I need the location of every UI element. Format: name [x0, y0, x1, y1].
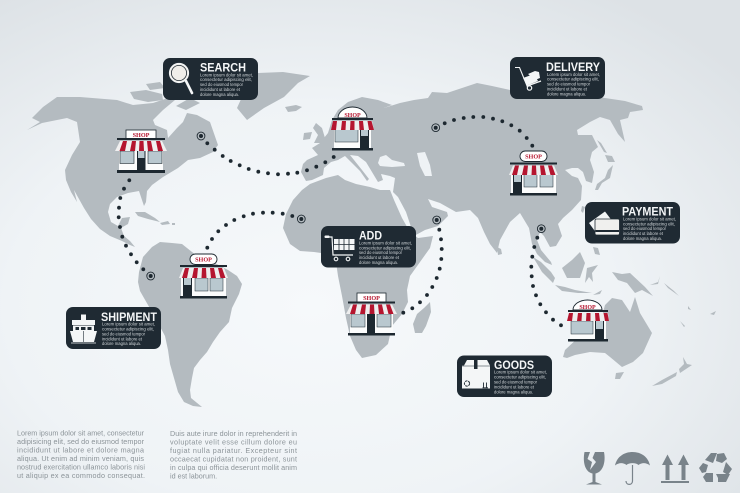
callout: goods: consectetur adipiscing elit,	[494, 375, 546, 380]
callout: shipment: Lorem ipsum dolor sit amet,	[102, 322, 155, 327]
callout: shipment	[66, 307, 161, 349]
callout: search: SEARCH	[200, 62, 246, 74]
icon: shopping cart	[324, 236, 354, 261]
callout: delivery: dolore magna aliqua.	[547, 91, 586, 96]
shop: China	[509, 151, 558, 196]
callout: add: incididunt ut labore et	[359, 255, 400, 260]
New Guinea and Pacific islands	[612, 272, 716, 327]
Sumatra and Java	[533, 257, 602, 295]
callout: search	[163, 58, 258, 100]
callout: goods: incididunt ut labore et	[494, 384, 535, 389]
icon: hand truck	[515, 68, 541, 90]
callout: payment	[585, 202, 680, 244]
icon: this way up arrows	[661, 454, 689, 483]
callout: delivery: consectetur adipiscing elit,	[547, 77, 599, 82]
inland seas	[378, 152, 432, 176]
text block: left paragraph: adipisicing elit, sed do eiusmod tempor	[17, 437, 145, 446]
shop: Europe	[331, 107, 374, 150]
callout: shipment: SHIPMENT	[101, 312, 157, 324]
Africa	[283, 175, 433, 358]
callout: search: dolore magna aliqua.	[200, 92, 239, 97]
route: Thailand to Australia	[529, 225, 563, 327]
callout: payment: consectetur adipiscing elit,	[623, 221, 675, 226]
callout: delivery: sed do eiusmod tempor	[547, 82, 591, 87]
callout: payment: Lorem ipsum dolor sit amet,	[623, 216, 676, 221]
shop: Africa: SHOP	[363, 295, 380, 302]
callout: add: consectetur adipiscing elit,	[359, 245, 411, 250]
callout: add	[321, 226, 416, 268]
Arctic islands	[130, 82, 200, 110]
Australia	[563, 297, 652, 367]
callout: delivery: Lorem ipsum dolor sit amet,	[547, 72, 600, 77]
callout: payment: sed do eiusmod tempor	[623, 226, 667, 231]
callout: shipment: consectetur adipiscing elit,	[102, 326, 154, 332]
shop: North America: SHOP	[133, 132, 150, 139]
text block: right paragraph: in culpa qui officia deserunt mollit anim	[170, 463, 297, 472]
shop: China: SHOP	[525, 153, 542, 160]
route: Brazil to West Africa	[205, 211, 305, 250]
route: Horn of Africa to South Africa	[401, 216, 444, 315]
shop: Australia	[567, 300, 609, 342]
callout: goods: sed do eiusmod tempor	[494, 380, 538, 384]
callout: payment: dolore magna aliqua.	[623, 236, 662, 241]
callout: add: sed do eiusmod tempor	[359, 250, 403, 255]
Borneo and Sulawesi	[562, 252, 598, 283]
Japan and Sakhalin	[595, 140, 615, 190]
callout: delivery: incididunt ut labore et	[547, 86, 588, 92]
shop: Australia: SHOP	[579, 305, 596, 311]
shop: South America	[179, 254, 228, 298]
callout: add: ADD	[359, 230, 382, 242]
Tasmania	[615, 372, 624, 379]
shop: South America: SHOP	[195, 256, 212, 263]
callout: goods: Lorem ipsum dolor sit amet,	[494, 370, 547, 375]
icon: ship	[70, 314, 97, 343]
world map	[27, 72, 716, 407]
icon: umbrella	[615, 452, 650, 484]
text block: left paragraph	[17, 428, 145, 480]
New Zealand	[652, 357, 692, 386]
text block: right paragraph: occaecat cupidatat non proident, sunt	[170, 454, 297, 464]
Sri Lanka, Taiwan and Philippines	[497, 206, 600, 255]
text block: left paragraph: aliqua. Ut enim ad minim veniam, quis	[17, 454, 144, 463]
Eurasia	[301, 83, 643, 265]
icon: credit cards	[589, 212, 620, 235]
shop: North America	[115, 130, 167, 173]
South America	[138, 242, 242, 407]
text block: left paragraph: nostrud exercitation ullamco laboris nisi	[17, 462, 145, 472]
callout: add: dolore magna aliqua.	[359, 260, 398, 265]
callout: search: Lorem ipsum dolor sit amet,	[200, 72, 253, 77]
callout: add: Lorem ipsum dolor sit amet,	[359, 240, 412, 245]
text block: right paragraph: voluptate velit esse cillum dolore eu	[170, 438, 297, 446]
North America	[27, 97, 218, 247]
text block: left paragraph: ut aliquip ex ea commodo consequat.	[17, 471, 145, 480]
route: USA to Peru	[117, 178, 155, 280]
callout: shipment: sed do eiusmod tempor	[102, 331, 146, 336]
callout: goods	[457, 356, 552, 397]
text block: left paragraph: incididunt ut labore et dolore magna	[17, 446, 144, 454]
Iceland	[285, 105, 302, 112]
callout: shipment: dolore magna aliqua.	[102, 341, 141, 346]
text block: right paragraph	[170, 429, 297, 480]
icon: fragile glass	[584, 452, 605, 484]
icon: magnifier	[170, 64, 192, 93]
Caribbean islands	[135, 212, 175, 225]
callout: goods: dolore magna aliqua.	[494, 389, 533, 394]
text block: right paragraph: fugiat nulla pariatur. Excepteur sint	[170, 446, 297, 455]
icon: recycle	[699, 453, 732, 482]
shop: Europe: SHOP	[344, 113, 361, 119]
text block: left paragraph: Lorem ipsum dolor sit amet, consectetur	[17, 428, 145, 438]
callout: payment: incididunt ut labore et	[623, 231, 664, 236]
Madagascar	[413, 302, 431, 333]
route: Central Asia to China	[432, 115, 534, 148]
callout: shipment: incididunt ut labore et	[102, 336, 143, 341]
callout: search: incididunt ut labore et	[200, 87, 241, 92]
callout: payment: PAYMENT	[622, 207, 673, 219]
text block: right paragraph: id est laborum.	[170, 472, 217, 480]
icon: cardboard box	[462, 360, 490, 388]
Greenland	[237, 72, 310, 120]
route: Canada to Europe	[197, 132, 336, 176]
text block: right paragraph: Duis aute irure dolor in reprehenderit in	[170, 429, 297, 438]
callout: search: consectetur adipiscing elit,	[200, 77, 252, 82]
shop: Africa	[346, 293, 397, 336]
callout: delivery: DELIVERY	[546, 62, 600, 74]
British Isles	[303, 123, 325, 143]
callout: delivery	[510, 57, 605, 99]
callout: search: sed do eiusmod tempor	[200, 82, 244, 87]
callout: goods: GOODS	[494, 360, 534, 372]
